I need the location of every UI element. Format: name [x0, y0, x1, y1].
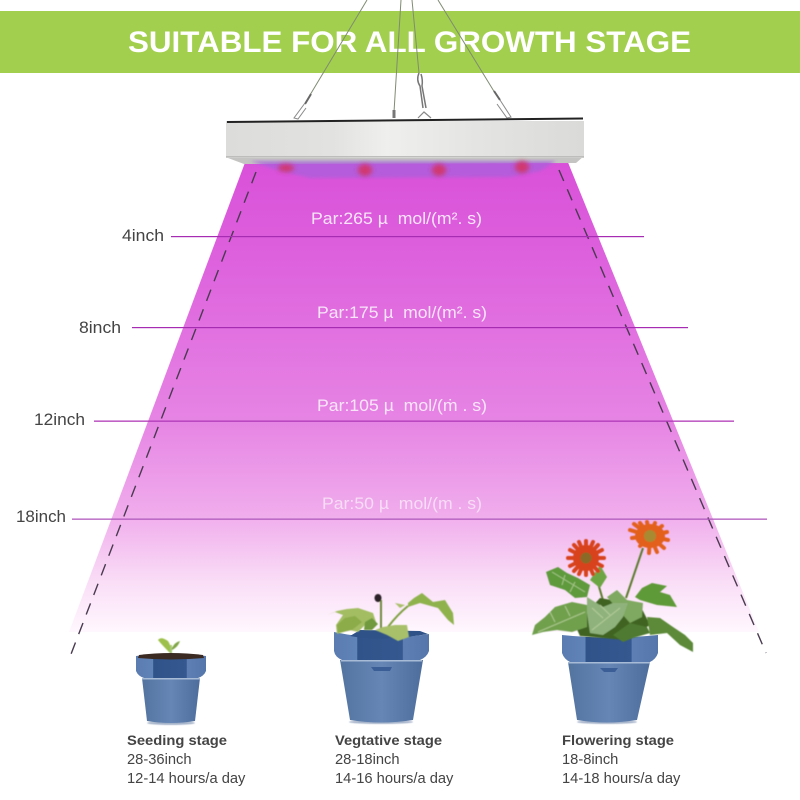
- caption: flowering stage: Flowering stage: [562, 732, 674, 748]
- flowering pot: [532, 522, 693, 724]
- caption: vegetative stage: [335, 732, 454, 787]
- caption: flowering stage: [562, 732, 681, 787]
- vegetative pot: [327, 593, 454, 724]
- caption: seeding stage: 12-14 hours/a day: [127, 771, 246, 787]
- caption: flowering stage: 18-8inch: [562, 752, 618, 768]
- distance line: 12inch: Par:105 µ mol/(ṁ . s): [317, 396, 487, 415]
- caption: seeding stage: [127, 732, 246, 787]
- caption: seeding stage: Seeding stage: [127, 732, 227, 748]
- distance line: 8inch: Par:175 µ mol/(m². s): [317, 303, 487, 322]
- caption: flowering stage: 14-18 hours/a day: [562, 771, 681, 787]
- flowering plant: [532, 522, 693, 652]
- distance line: 8inch: 8inch: [79, 318, 121, 337]
- distance line: 18inch: Par:50 µ mol/(m . s): [322, 494, 482, 513]
- seedling pot: [136, 638, 206, 725]
- dashed beam edges: [68, 170, 766, 662]
- distance line: 4inch: 4inch: [122, 226, 164, 245]
- title banner: [0, 11, 800, 73]
- vegetative plant: [327, 593, 454, 641]
- caption: vegetative stage: 14-16 hours/a day: [335, 771, 454, 787]
- leaves: [575, 598, 650, 640]
- title banner: SUITABLE FOR ALL GROWTH STAGE: [128, 26, 691, 59]
- distance line: 12inch: 12inch: [34, 410, 85, 429]
- hanging wires: [294, 0, 511, 119]
- distance line: 18inch: [16, 494, 767, 526]
- gerbera flower right: [630, 522, 668, 553]
- distance line: 4inch: Par:265 µ mol/(m². s): [311, 209, 482, 228]
- gerbera flower left: [568, 541, 604, 575]
- seedling: [158, 638, 180, 655]
- LED strip: [250, 161, 556, 178]
- distance line: 4inch: [122, 209, 644, 245]
- light beam: [69, 160, 759, 632]
- caption: vegetative stage: Vegtative stage: [335, 732, 442, 748]
- grow light panel: [226, 118, 584, 178]
- distance line: 8inch: [79, 303, 688, 337]
- distance line: 12inch: [34, 396, 734, 429]
- caption: vegetative stage: 28-18inch: [335, 752, 400, 768]
- caption: seeding stage: 28-36inch: [127, 752, 192, 768]
- distance line: 18inch: 18inch: [16, 507, 66, 526]
